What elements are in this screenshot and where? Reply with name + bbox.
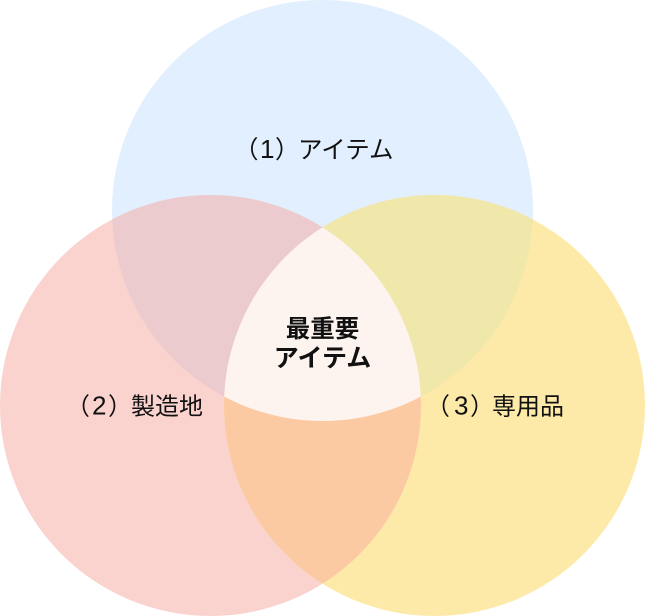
circle: (1) item: [112, 0, 533, 421]
label: (1) item: （: [234, 136, 258, 164]
label: (3) dedicated product: （: [426, 394, 450, 420]
label: (3) dedicated product: 専用品: [492, 394, 564, 420]
centre label line 2: アイテム: [274, 344, 371, 372]
label: (2) place of manufacture: 製造地: [131, 394, 203, 420]
label: (1) item: 1: [260, 134, 274, 164]
overlap: centre region: [224, 228, 421, 421]
circle: (3) dedicated product: [224, 195, 645, 616]
label: (1) item: ）: [275, 136, 300, 164]
label: (2) place of manufacture: ）: [108, 394, 132, 420]
label: (2) place of manufacture: （: [66, 394, 90, 420]
centre label line 1: 最重要: [286, 315, 359, 343]
overlap: place of manufacture and dedicated product: [224, 396, 421, 584]
circle: (2) place of manufacture: [0, 195, 421, 616]
label: (2) place of manufacture: 2: [92, 390, 106, 420]
label: (1) item: アイテム: [298, 137, 394, 164]
overlap: item and dedicated product: [322, 195, 533, 396]
centre label: most important item: [274, 315, 371, 372]
overlap: item and place of manufacture: [112, 195, 322, 396]
label: (3) dedicated product: ）: [470, 394, 494, 420]
label: (3) dedicated product: 3: [454, 390, 468, 420]
